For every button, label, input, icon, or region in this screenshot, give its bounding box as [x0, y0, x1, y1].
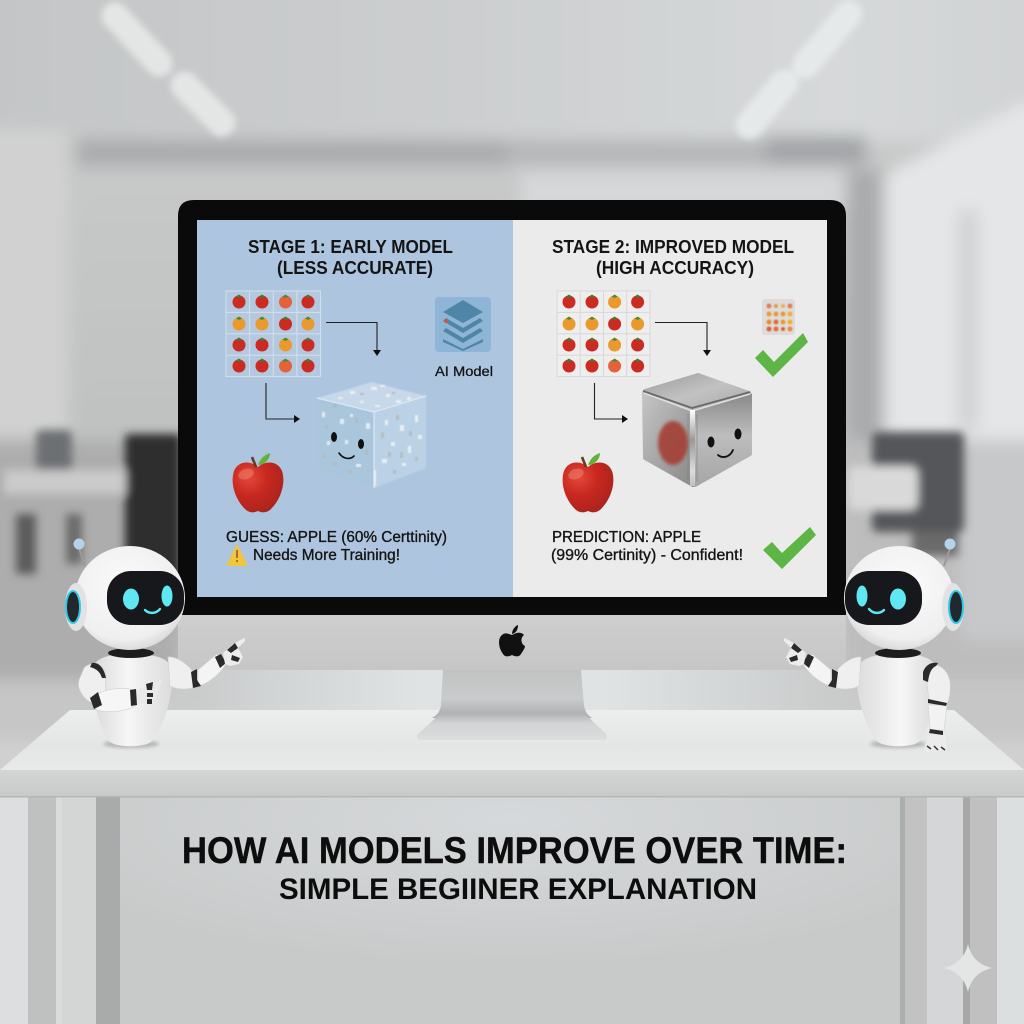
- arrow: grid to metal cube top: [655, 322, 711, 356]
- monitor: [120, 200, 904, 740]
- heading: stage 1: (LESS ACCURATE): [277, 258, 433, 278]
- arrow: grid to cube top: [326, 322, 381, 356]
- title: [182, 830, 847, 906]
- icon: apple logo: [499, 625, 525, 656]
- apple: stage 2: [563, 453, 613, 512]
- fruit grid: stage 2: [557, 291, 650, 377]
- monitor stand: [417, 670, 607, 740]
- result text: stage 1: Needs More Training!: [253, 547, 400, 564]
- icon: warning: [227, 544, 247, 566]
- result text: stage 2: PREDICTION: APPLE: [552, 529, 701, 546]
- monitor chin: [178, 612, 846, 670]
- icon: AI model layers: [435, 297, 491, 352]
- result text: stage 2: (99% Certinity) - Confident!: [551, 547, 743, 564]
- arrow: grid to cube left: [266, 383, 300, 423]
- panel: stage 2: [513, 220, 827, 597]
- icon: check bottom: [763, 527, 816, 569]
- heading: stage 1: [248, 237, 453, 278]
- arrow: grid to metal cube left: [594, 383, 628, 423]
- icon: small fruit chart: [762, 299, 795, 335]
- glass cube: [317, 382, 426, 488]
- ceiling lights: [96, 0, 868, 144]
- apple: stage 1: [233, 453, 283, 512]
- result text: stage 1: GUESS: APPLE (60% Certtinity): [226, 529, 447, 546]
- heading: stage 2: (HIGH ACCURACY): [596, 258, 754, 278]
- heading: stage 1: STAGE 1: EARLY MODEL: [248, 237, 453, 257]
- background: blurred office: [0, 0, 1024, 740]
- heading: stage 2: [552, 237, 794, 278]
- desk: [0, 710, 1024, 1024]
- title: SIMPLE BEGIINER EXPLANATION: [279, 873, 757, 906]
- chairs and tables: [4, 430, 964, 604]
- metal cube: [643, 375, 750, 486]
- icon: check top: [755, 333, 808, 377]
- label: AI model: AI Model: [435, 363, 493, 379]
- monitor bezel: [178, 200, 846, 615]
- title: HOW AI MODELS IMPROVE OVER TIME:: [182, 830, 847, 871]
- robot: right: [784, 538, 964, 752]
- heading: stage 2: STAGE 2: IMPROVED MODEL: [552, 237, 794, 257]
- result text: stage 1: [226, 529, 447, 564]
- icon: sparkle star: [944, 944, 992, 992]
- fruit grid: stage 1: [226, 291, 320, 377]
- panel: stage 1: [197, 220, 513, 597]
- robot: left: [65, 538, 245, 748]
- result text: stage 2: [551, 529, 743, 564]
